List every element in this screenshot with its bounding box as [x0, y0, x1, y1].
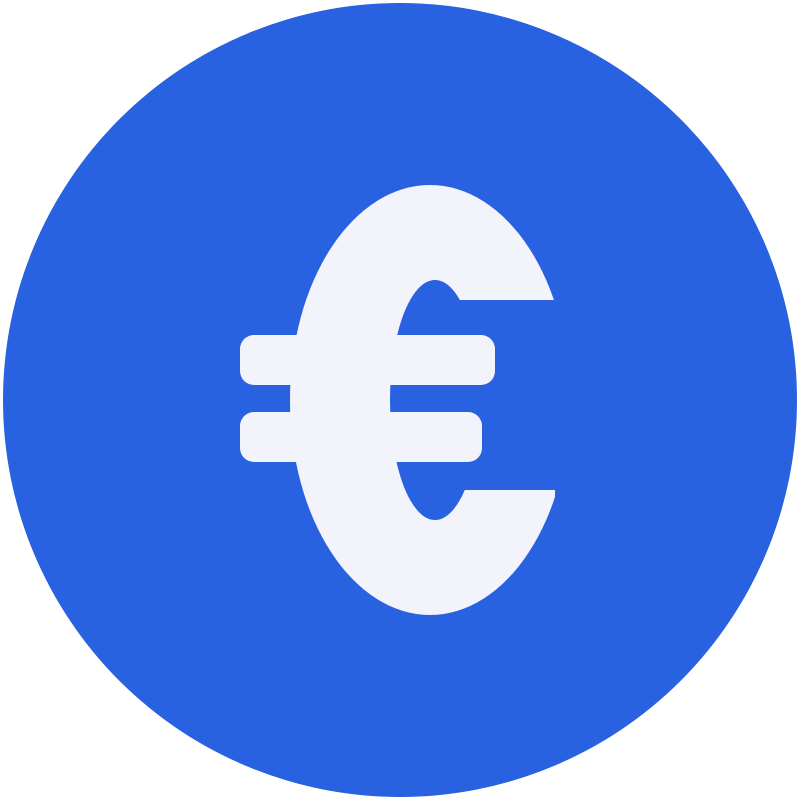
euro symbol	[240, 180, 615, 620]
